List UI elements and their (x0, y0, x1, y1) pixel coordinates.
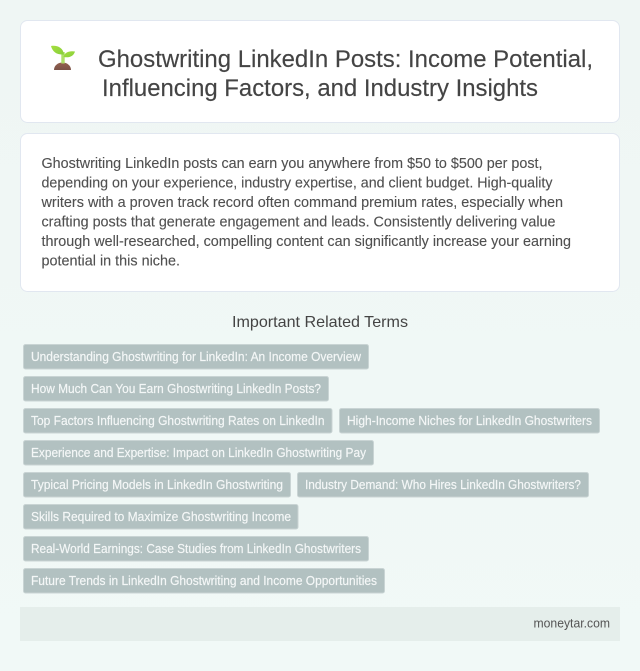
summary paragraph: crafting posts that generate engagement and leads. Consistently delivering value (42, 214, 556, 230)
tag: future trends: Future Trends in LinkedIn Ghostwriting and Income Opportunities (31, 574, 377, 588)
tag: top factors: Top Factors Influencing Ghostwriting Rates on LinkedIn (31, 414, 325, 428)
summary paragraph: writers with a proven track record often command premium rates, especially when (41, 195, 563, 211)
tag: experience and expertise (24, 440, 374, 465)
tag: industry demand: Industry Demand: Who Hires LinkedIn Ghostwriters? (305, 478, 581, 492)
summary paragraph: potential in this niche. (42, 254, 180, 270)
tag: pricing models: Typical Pricing Models in LinkedIn Ghostwriting (31, 478, 283, 492)
tag: income overview (24, 344, 368, 369)
tag: high-income niches (340, 408, 600, 433)
tag: real-world earnings: Real-World Earnings: Case Studies from LinkedIn Ghostwriters (31, 542, 361, 556)
summary paragraph: Ghostwriting LinkedIn posts can earn you anywhere from $50 to $500 per post, (42, 156, 542, 172)
tag: high-income niches: High-Income Niches for LinkedIn Ghostwriters (347, 414, 592, 428)
title: Influencing Factors, and Industry Insights (102, 75, 538, 102)
tag: experience and expertise: Experience and Expertise: Impact on LinkedIn Ghostwriting Pay (31, 446, 367, 460)
panel: title card (20, 20, 620, 122)
tag: income overview: Understanding Ghostwriting for LinkedIn: An Income Overview (31, 350, 362, 364)
footer site name: moneytar.com (534, 616, 610, 630)
title: Ghostwriting LinkedIn Posts: Income Potential, (98, 46, 593, 73)
tag: top factors (24, 408, 332, 433)
footer bar (20, 607, 620, 641)
summary paragraph (41, 156, 571, 270)
summary paragraph: through well-researched, compelling content can significantly increase your earning (42, 234, 571, 250)
summary paragraph: depending on your experience, industry expertise, and client budget. High-quality (42, 176, 553, 192)
tag: how much can you earn: How Much Can You Earn Ghostwriting LinkedIn Posts? (31, 382, 321, 396)
tag: future trends (24, 568, 384, 593)
icon: seedling (51, 46, 75, 70)
panel: summary text (20, 134, 620, 292)
tag: skills required (24, 504, 298, 529)
tag: real-world earnings (24, 536, 368, 561)
heading: important related terms: Important Related Terms (232, 314, 408, 331)
tag: pricing models (24, 472, 290, 497)
tag list (24, 344, 600, 593)
tag: industry demand (298, 472, 588, 497)
tag: skills required: Skills Required to Maximize Ghostwriting Income (31, 510, 291, 524)
title (98, 46, 593, 102)
tag: how much can you earn (24, 376, 328, 401)
